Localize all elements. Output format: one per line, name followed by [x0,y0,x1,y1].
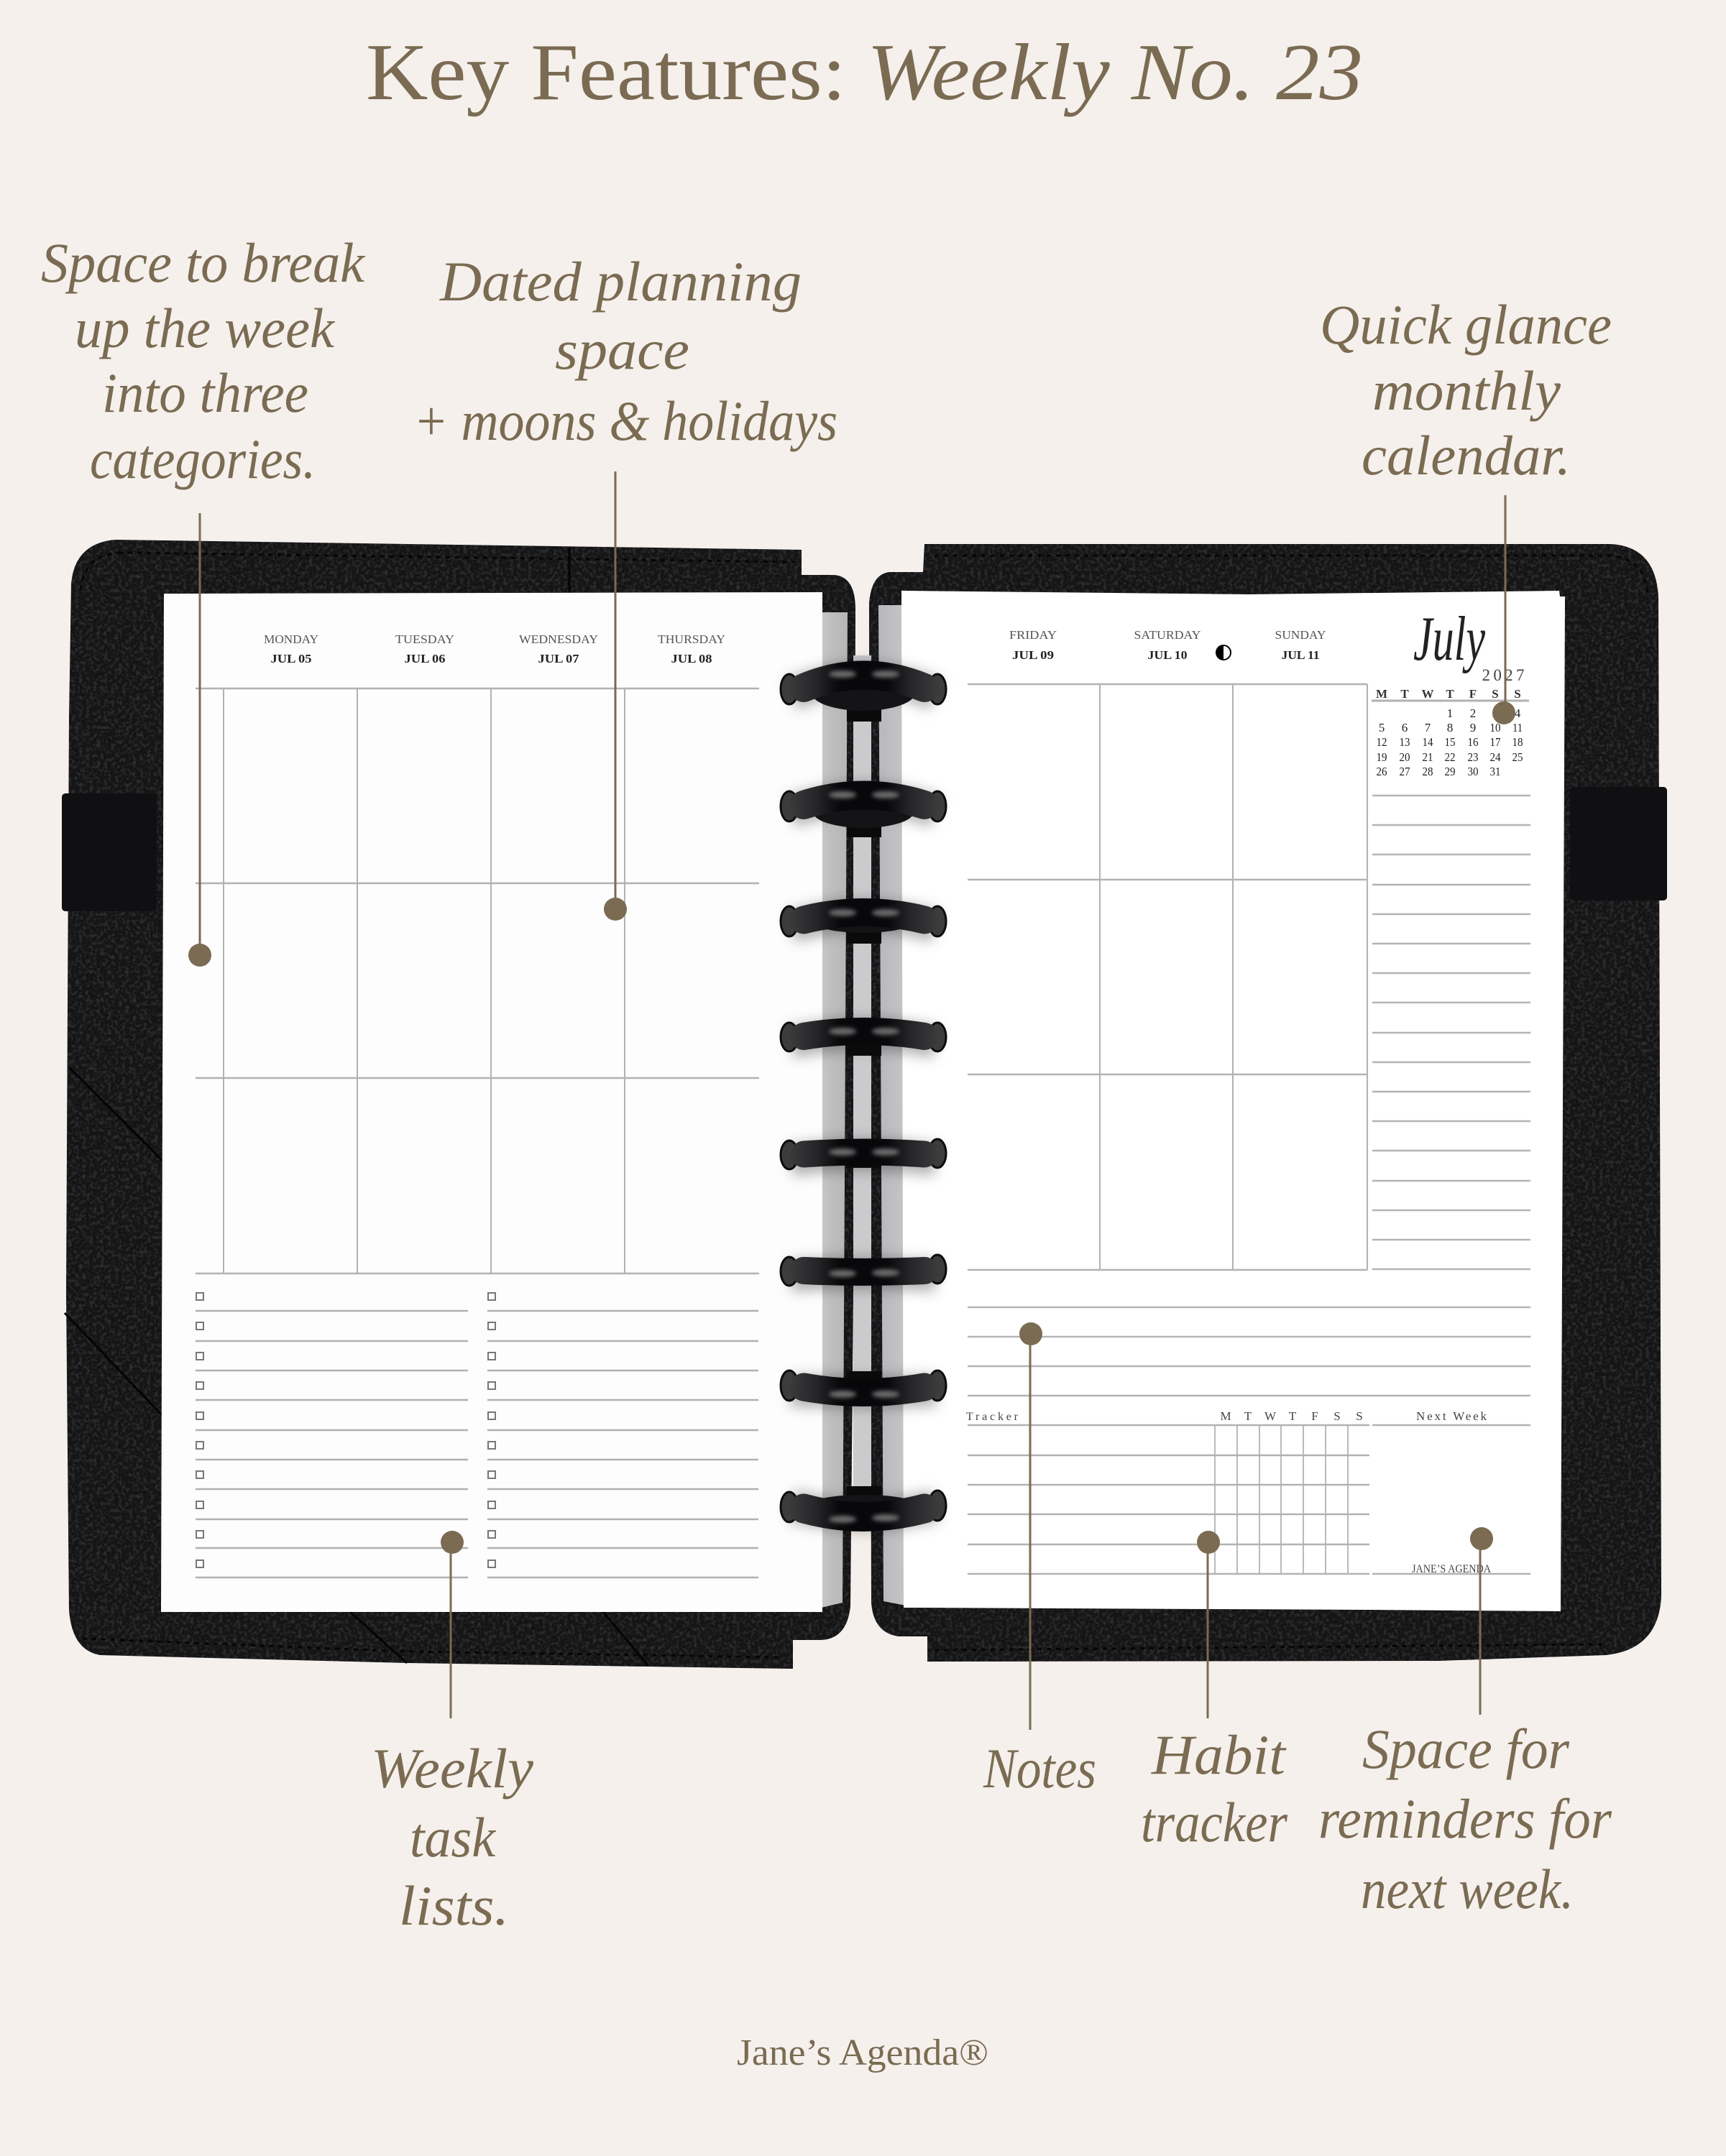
next week heading: Next Week [1416,1409,1487,1423]
mini calendar: 14 [1422,735,1433,749]
side note lines [1372,796,1530,1269]
leader: dated planning [604,471,627,921]
tracker weekday letters [1220,1409,1363,1423]
weekday headers left: JUL 06 [404,652,446,665]
weekday headers left: JUL 07 [538,652,579,665]
tracker weekday letters: F [1311,1409,1318,1423]
callout: three categories [41,231,365,490]
planner photo [62,540,1667,1669]
tracker weekday letters: S [1356,1409,1363,1423]
callout: task lists: Weekly [371,1737,533,1800]
right page [901,591,1565,1611]
weekday headers right: SUNDAY [1275,628,1326,642]
callout: monthly calendar: monthly [1372,359,1561,422]
brand mark on page: JANE’S AGENDA [1412,1563,1491,1575]
mini calendar [1372,687,1529,778]
callout: next week reminders [1318,1718,1612,1920]
mini calendar: 29 [1445,765,1455,778]
mini calendar: S [1514,687,1521,701]
ring 4 [781,1023,946,1056]
callout: three categories: up the week [75,297,335,359]
habit tracker grid [968,1425,1530,1574]
tracker heading: Tracker [966,1411,1019,1423]
callout: habit tracker: tracker [1141,1791,1288,1853]
ring 2 [781,791,946,837]
mini calendar: 4 [1515,706,1521,720]
mini calendar: 26 [1376,765,1387,778]
right page edges stack [878,605,913,1607]
weekday headers left: JUL 08 [671,652,712,665]
left page [161,592,822,1612]
ring binder [781,671,946,1523]
leader: three categories [188,513,211,967]
callout: dated planning space: Dated planning [439,250,802,313]
callout: task lists: lists. [399,1874,509,1937]
callout: dated planning space: space [555,318,689,381]
callout: monthly calendar: Quick glance [1320,293,1612,356]
mini calendar: 25 [1512,750,1523,764]
mini calendar: 19 [1376,750,1387,764]
weekday headers right: JUL 09 [1012,648,1054,662]
mini calendar: 13 [1399,735,1410,749]
year: 2027 [1482,666,1524,684]
elastic band right [1570,787,1667,900]
leader: monthly calendar [1492,495,1515,724]
mini calendar: 28 [1422,765,1433,778]
mini calendar: S [1492,687,1499,701]
tracker weekday letters: T [1289,1409,1297,1423]
mini calendar: 18 [1512,735,1523,749]
ring 5 [781,1139,946,1169]
mini calendar: F [1469,687,1477,701]
daily grid left [196,688,759,1273]
weekday headers left: MONDAY [264,632,318,646]
weekday headers left: THURSDAY [658,632,725,646]
weekday headers right: JUL 10 [1147,648,1188,662]
mini calendar: 15 [1445,735,1455,749]
tracker weekday letters: T [1244,1409,1252,1423]
mini calendar: W [1422,687,1433,701]
weekday headers right [1009,628,1326,662]
mini calendar: 21 [1422,750,1433,764]
weekday headers right: JUL 11 [1281,648,1320,662]
title [366,28,1363,117]
elastic band left [62,793,157,911]
mini calendar: T [1446,687,1454,701]
title: Weekly No. 23 [867,28,1363,117]
callout: dated planning space: + moons & holidays [413,390,837,452]
ring 3 [781,906,946,944]
title: Key Features: [366,28,846,117]
leader: habit tracker [1197,1531,1220,1718]
mini calendar: 11 [1512,721,1523,734]
mini calendar: 3 [1492,706,1498,720]
mini calendar: 30 [1468,765,1478,778]
task list lines [196,1311,758,1577]
mini calendar: 5 [1379,721,1385,734]
mini calendar: T [1400,687,1409,701]
callout: habit tracker: Habit [1151,1723,1287,1786]
mini calendar: 12 [1376,735,1387,749]
mini calendar: 8 [1447,721,1453,734]
mini calendar: 23 [1468,750,1478,764]
leader: next week [1470,1527,1493,1715]
mini calendar: 1 [1447,706,1453,720]
callout: habit tracker [1141,1723,1288,1853]
weekday headers left [264,632,725,665]
mini calendar: 27 [1399,765,1410,778]
mini calendar: 22 [1445,750,1455,764]
mini calendar: 6 [1402,721,1408,734]
callout: dated planning space [413,250,837,452]
ring shadows [791,678,936,1515]
task checkboxes [196,1293,495,1567]
footer brand: Jane’s Agenda® [737,2032,988,2073]
ring 1 [781,671,946,722]
weekday headers right: FRIDAY [1009,628,1057,642]
cover seams and stitching [65,548,1648,1666]
left page edges stack [812,612,848,1610]
mini calendar: 24 [1489,750,1501,764]
centre gap strip [853,655,871,1489]
leader: task lists [441,1531,464,1718]
weekday headers right: SATURDAY [1134,628,1201,642]
mini calendar: 7 [1425,721,1431,734]
month name: July [1413,604,1486,674]
callout: three categories: categories. [90,428,316,490]
callout: three categories: into three [102,361,308,424]
leader: notes [1019,1322,1042,1730]
callout: next week reminders: Space for [1362,1718,1570,1780]
mini calendar: 17 [1489,735,1501,749]
daily grid right [968,684,1367,1270]
ring 7 [781,1370,946,1401]
callout: task lists: task [410,1806,496,1869]
callout: next week reminders: next week. [1361,1858,1574,1920]
mini calendar: 2 [1470,706,1476,720]
ring 8 [781,1486,946,1523]
callout: monthly calendar: calendar. [1362,424,1571,487]
mini calendar: 10 [1489,721,1501,734]
mini calendar: 20 [1399,750,1410,764]
right cover [869,544,1661,1662]
notes lines [968,1307,1530,1396]
ring 6 [781,1255,946,1286]
mini calendar: M [1376,687,1387,701]
mini calendar: 16 [1468,735,1478,749]
weekday headers left: TUESDAY [395,632,454,646]
weekday headers left: JUL 05 [270,652,312,665]
callout: monthly calendar [1320,293,1612,487]
callout: next week reminders: reminders for [1318,1787,1612,1850]
callout: notes: Notes [983,1737,1096,1800]
weekday headers left: WEDNESDAY [519,632,598,646]
callout: task lists [371,1737,533,1937]
mini calendar: 31 [1489,765,1501,778]
left cover [66,540,855,1669]
tracker weekday letters: S [1333,1409,1341,1423]
moon phase icon [1216,645,1231,660]
tracker weekday letters: W [1264,1409,1277,1423]
mini calendar: 9 [1470,721,1476,734]
tracker weekday letters: M [1220,1409,1231,1423]
callout: three categories: Space to break [41,231,365,294]
